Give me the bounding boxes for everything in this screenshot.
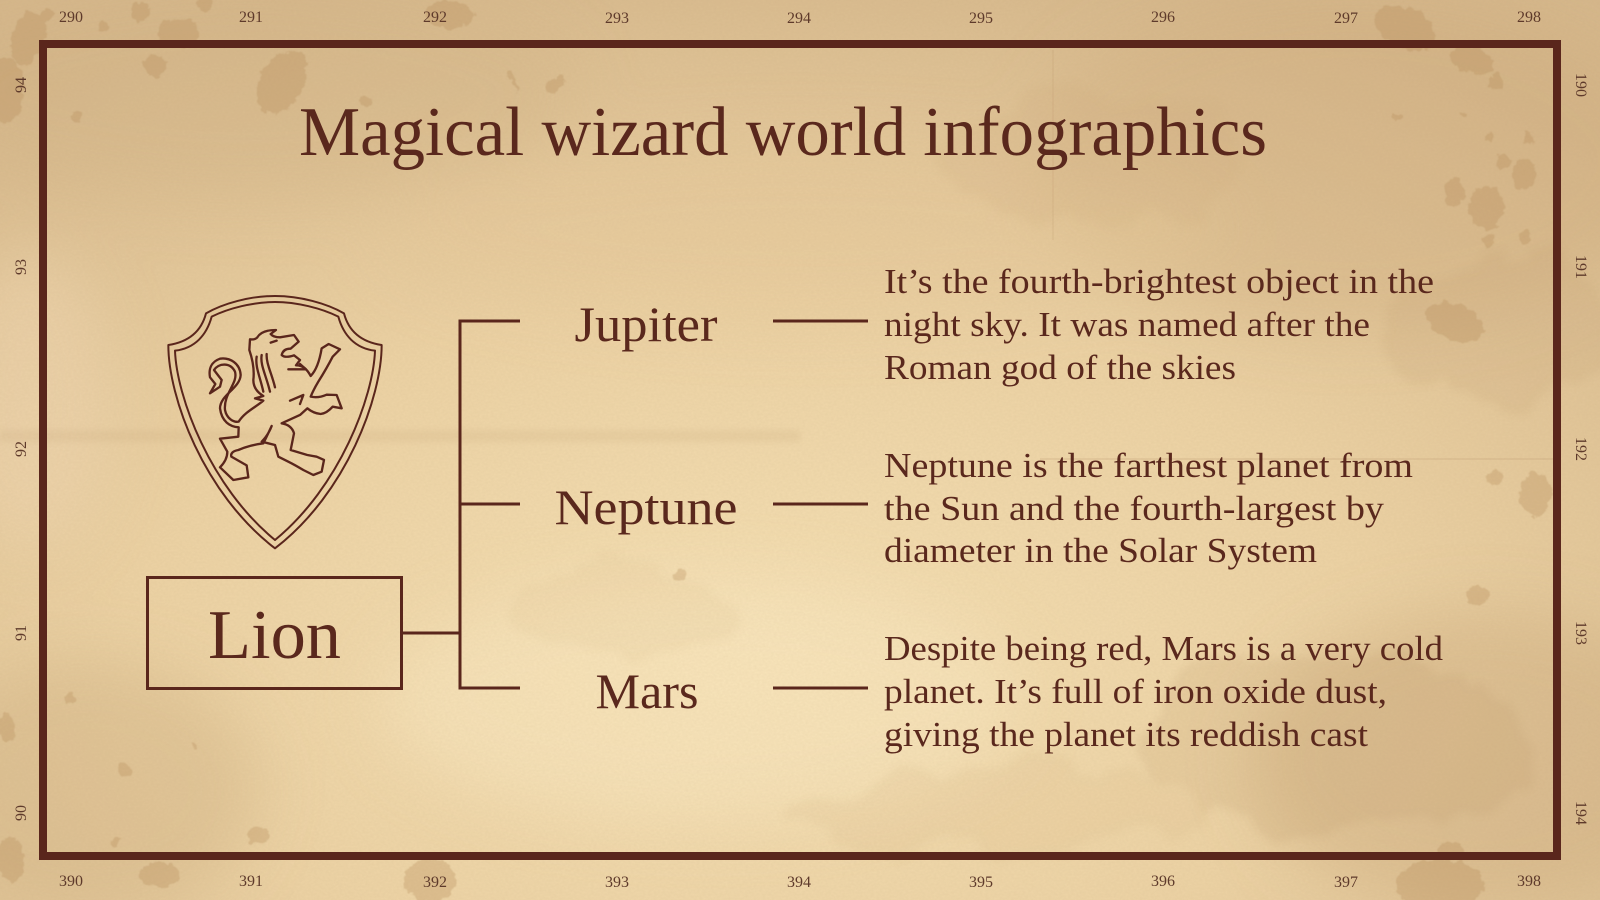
left scale numbers: 93 [13,259,30,275]
description: Neptune: the Sun and the fourth-largest by [884,489,1385,528]
heading: Mars: Mars [596,663,698,719]
row: Neptune [554,446,1413,570]
top scale numbers: 292 [423,9,447,26]
row: Jupiter [574,262,1434,387]
left scale numbers: 90 [13,805,30,821]
description: Neptune: Neptune is the farthest planet from [884,446,1413,485]
description: Jupiter: Roman god of the skies [884,348,1236,387]
description: Mars: planet. It’s full of iron oxide dust, [884,672,1387,711]
right scale numbers: 193 [1572,621,1589,645]
bottom scale numbers: 398 [1517,873,1541,890]
bottom scale numbers: 396 [1151,873,1175,890]
description: Jupiter: night sky. It was named after the [884,305,1370,344]
icon: lion crest shield [168,296,382,548]
top scale numbers [59,9,1541,27]
right scale numbers: 192 [1572,437,1589,461]
top scale numbers: 293 [605,10,629,27]
description: Mars: giving the planet its reddish cast [884,715,1368,754]
lion mane and details [256,341,306,404]
lion outline [210,330,342,480]
row: Mars [596,629,1444,754]
bottom scale numbers: 392 [423,874,447,891]
top scale numbers: 297 [1334,10,1358,27]
top scale numbers: 296 [1151,9,1175,26]
top scale numbers: 298 [1517,9,1541,26]
right scale numbers [1572,73,1589,825]
bottom scale numbers: 391 [239,873,263,890]
label box: Lion: Lion [208,597,341,674]
left scale numbers: 92 [13,441,30,457]
bottom scale numbers: 395 [969,874,993,891]
left scale numbers [13,77,30,821]
description: Neptune [884,446,1413,570]
left scale numbers: 91 [13,625,30,641]
connector line: Jupiter [773,320,868,322]
top scale numbers: 291 [239,9,263,26]
left scale numbers: 94 [13,77,30,93]
right scale numbers: 190 [1572,73,1589,97]
top scale numbers: 294 [787,10,811,27]
right scale numbers: 191 [1572,255,1589,279]
title: Magical wizard world infographics [299,94,1267,171]
heading: Neptune: Neptune [554,479,738,535]
description: Neptune: diameter in the Solar System [884,531,1317,570]
bottom scale numbers: 394 [787,874,811,891]
bottom scale numbers: 393 [605,874,629,891]
bottom scale numbers [59,873,1541,891]
label box: Lion [148,578,402,688]
connector line: Mars [773,686,868,690]
top scale numbers: 290 [59,9,83,26]
top scale numbers: 295 [969,10,993,27]
connector line: Neptune [773,502,868,506]
description: Mars: Despite being red, Mars is a very cold [884,629,1444,668]
description: Jupiter: It’s the fourth-brightest object in the [884,262,1434,301]
shield outer outline [168,296,382,548]
shield inner outline [175,302,375,540]
bottom scale numbers: 390 [59,873,83,890]
heading: Jupiter: Jupiter [574,296,718,352]
description: Jupiter [884,262,1434,387]
right scale numbers: 194 [1572,801,1589,825]
bottom scale numbers: 397 [1334,874,1358,891]
tree connector [402,321,520,688]
description: Mars [884,629,1444,754]
